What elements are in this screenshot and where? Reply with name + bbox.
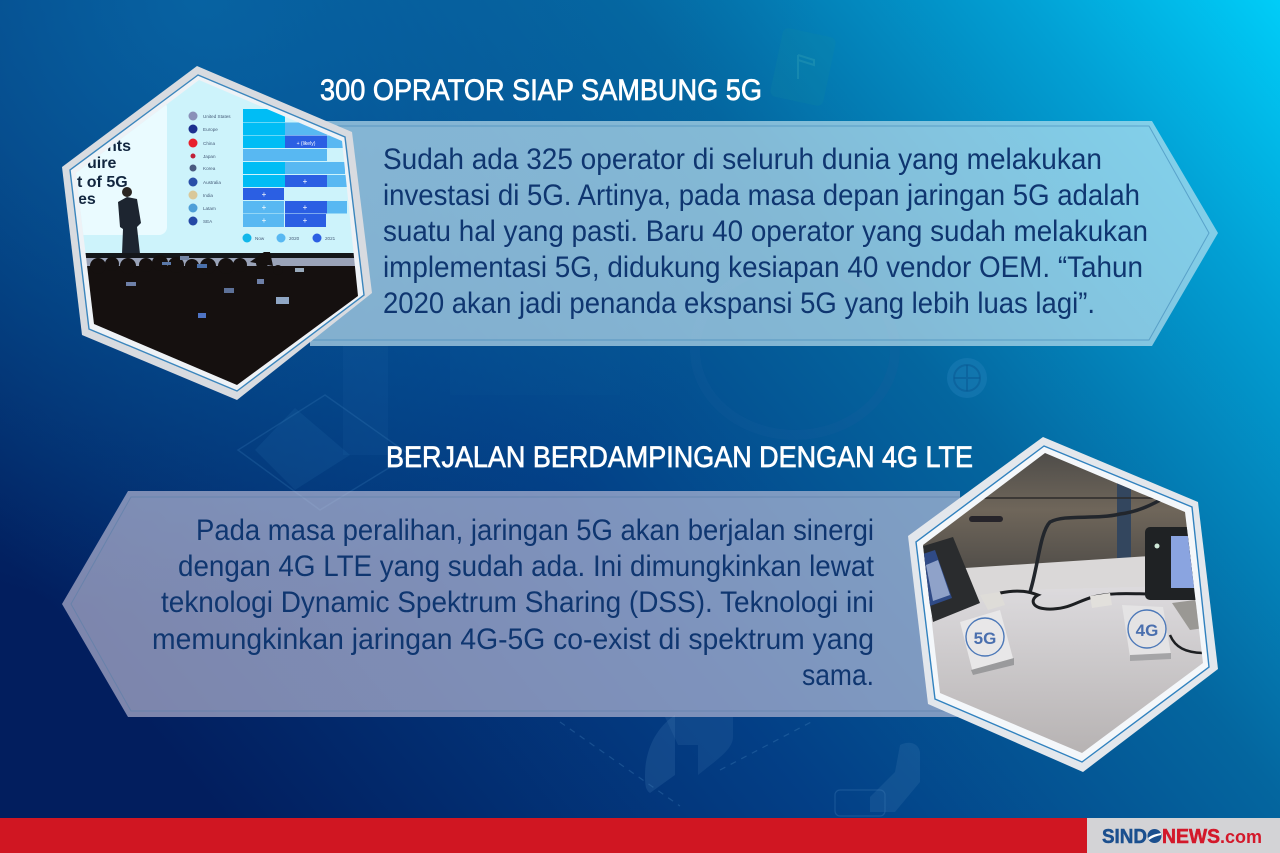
hexagon photo: keynote stage: uire: [87, 155, 116, 172]
logo: SINDOnews: SIND: [1102, 826, 1147, 848]
hexagon photo: keynote stage: Latam: [203, 206, 216, 211]
text block: operator investment: Sudah ada 325 operator di seluruh dunia yang melakukan: [383, 143, 1102, 176]
hexagon photo: keynote stage: nts: [107, 138, 131, 155]
hexagon photo: keynote stage: Europe: [203, 127, 218, 132]
hexagon photo: keynote stage: 2020: [289, 236, 300, 241]
hexagon photo: keynote stage: Japan: [203, 154, 216, 159]
logo: SINDOnews: [1087, 818, 1280, 853]
text block: dynamic spectrum sharing: sama.: [802, 659, 874, 692]
hexagon photo: keynote stage: +: [303, 203, 308, 212]
hexagon photo: keynote stage: 2021: [325, 236, 336, 241]
hexagon photo: keynote stage: +: [262, 216, 267, 225]
hexagon photo: 5G and 4G devices: [908, 437, 1218, 772]
hexagon photo: keynote stage: Australia: [203, 180, 221, 185]
text block: operator investment: implementasi 5G, didukung kesiapan 40 vendor OEM. “Tahun: [383, 251, 1143, 284]
text block: operator investment: suatu hal yang pasti. Baru 40 operator yang sudah melakukan: [383, 215, 1148, 248]
hexagon photo: keynote stage: es: [78, 191, 96, 208]
text block: operator investment: investasi di 5G. Artinya, pada masa depan jaringan 5G adalah: [383, 179, 1140, 212]
text block: dynamic spectrum sharing: teknologi Dynamic Spektrum Sharing (DSS). Teknologi ini: [161, 586, 874, 619]
text block: dynamic spectrum sharing: [152, 514, 875, 692]
hexagon photo: keynote stage: India: [203, 193, 213, 198]
footer bar: [0, 818, 1088, 853]
hexagon photo: keynote stage: +: [262, 190, 267, 199]
hexagon photo: keynote stage: China: [203, 141, 215, 146]
hexagon photo: keynote stage: +: [303, 177, 308, 186]
hexagon photo: keynote stage: Korea: [203, 166, 216, 171]
background tech illustration: [238, 27, 987, 816]
logo: SINDOnews: NEWS: [1162, 826, 1220, 848]
text block: dynamic spectrum sharing: Pada masa peralihan, jaringan 5G akan berjalan sinergi: [196, 514, 874, 547]
hexagon photo: 5G and 4G devices: 5G: [974, 629, 996, 648]
panel: coexistence text arrow: [62, 491, 960, 717]
hexagon photo: 5G and 4G devices: 4G: [1136, 621, 1158, 640]
hexagon photo: keynote stage: [60, 60, 380, 400]
hexagon photo: keynote stage: + (likely): [297, 141, 316, 147]
hexagon photo: keynote stage: +: [262, 203, 267, 212]
text block: dynamic spectrum sharing: memungkinkan jaringan 4G-5G co-exist di spektrum yang: [152, 623, 874, 656]
hexagon photo: keynote stage: SEA: [203, 219, 213, 224]
hexagon photo: keynote stage: +: [303, 216, 308, 225]
heading: 300 oprator: 300 OPRATOR SIAP SAMBUNG 5G: [320, 74, 762, 107]
logo: SINDOnews: .com: [1220, 827, 1262, 847]
text block: operator investment: 2020 akan jadi penanda ekspansi 5G yang lebih luas lagi”.: [383, 287, 1095, 320]
heading: 4G LTE: BERJALAN BERDAMPINGAN DENGAN 4G LTE: [386, 441, 973, 474]
hexagon photo: keynote stage: t of 5G: [77, 174, 128, 191]
hexagon photo: keynote stage: Now: [255, 236, 265, 241]
panel: operator text arrow: [310, 121, 1218, 346]
text block: operator investment: [383, 143, 1148, 320]
text block: dynamic spectrum sharing: dengan 4G LTE yang sudah ada. Ini dimungkinkan lewat: [178, 550, 875, 583]
hexagon photo: keynote stage: United States: [203, 114, 231, 119]
